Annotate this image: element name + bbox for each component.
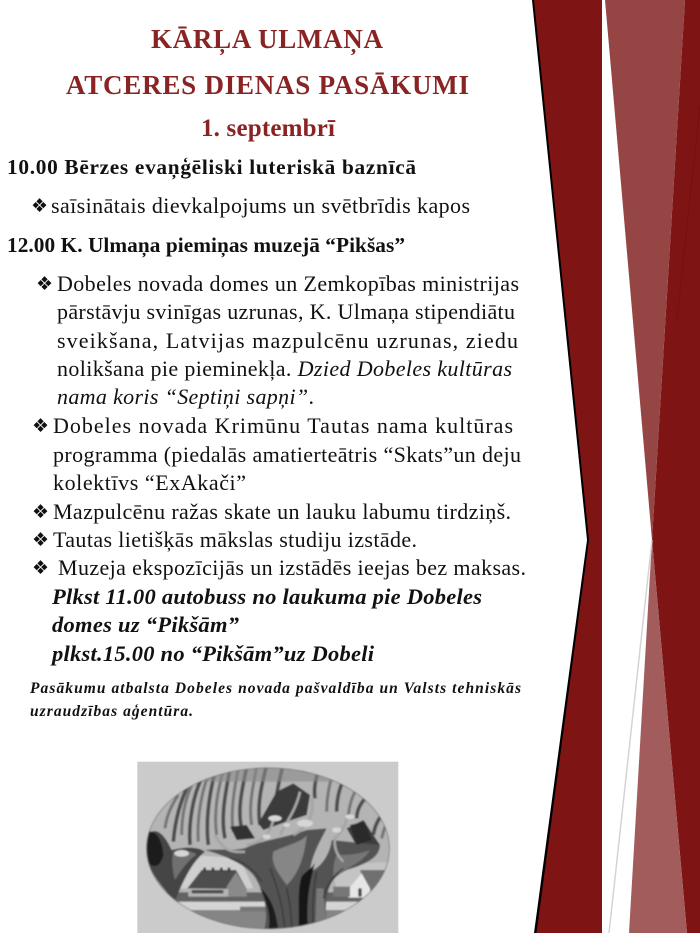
second event list (32, 271, 526, 580)
bus information: domes uz “Pikšām” (52, 612, 239, 637)
cut branch ends and shoots (215, 792, 347, 862)
item: speeches: nolikšana pie pieminekļa. Dzied Dobeles kultūras (57, 356, 512, 381)
bus information (50, 584, 482, 666)
item: speeches (36, 271, 519, 409)
item: free entry: ❖ (32, 557, 49, 579)
item: art exhibition: Tautas lietišķās mākslas studiju izstāde. (53, 527, 417, 552)
support note (30, 680, 521, 720)
support note: Pasākumu atbalsta Dobeles novada pašvaldība un Valsts tehniskās (30, 680, 521, 697)
item: free entry: Muzeja ekspozīcijās un izstādēs ieejas bez maksas. (58, 555, 526, 580)
farmhouse right (360, 869, 385, 892)
title (66, 24, 469, 100)
item: speeches: pārstāvju svinīgas uzrunas, K. Ulmaņa stipendiātu (57, 299, 515, 324)
item: Krimūnu programme: kolektīvs “ExAkači” (53, 470, 246, 495)
item: Krimūnu programme (32, 413, 521, 495)
first event heading: 10.00 Bērzes evaņģēliski luteriskā baznīcā (7, 155, 416, 180)
date heading: 1. septembrī (201, 115, 336, 142)
item: speeches: ❖ (36, 273, 53, 295)
item: Krimūnu programme: Dobeles novada Krimūnu Tautas nama kultūras (53, 413, 513, 438)
support note: uzraudzības aģentūra. (30, 703, 193, 720)
item: harvest show: Mazpulcēnu ražas skate un lauku labumu tirdziņš. (53, 499, 511, 524)
first event item: saīsinātais dievkalpojums un svētbrīdis kapos (51, 193, 470, 218)
item: harvest show: ❖ (32, 501, 49, 523)
item: speeches: Dobeles novada domes un Zemkopības ministrijas (57, 271, 519, 296)
item: speeches: nama koris “Septiņi sapņi”. (57, 384, 314, 409)
title: ATCERES DIENAS PASĀKUMI (66, 70, 469, 100)
ground (174, 892, 364, 902)
central willow (205, 828, 380, 932)
bus information: plkst.15.00 no “Pikšām”uz Dobeli (50, 641, 375, 666)
bus information: Plkst 11.00 autobuss no laukuma pie Dobeles (51, 584, 482, 609)
sky gap behind the farm (180, 855, 253, 888)
distant tree crown (258, 783, 310, 830)
left willow (147, 831, 205, 901)
first event item: ❖ (31, 195, 48, 217)
trunk hatching (230, 858, 343, 932)
second event heading: 12.00 K. Ulmaņa piemiņas muzejā “Pikšas” (7, 233, 405, 258)
item: art exhibition: ❖ (32, 529, 49, 551)
background tree strokes (173, 765, 385, 845)
title: KĀRĻA ULMAŅA (151, 24, 384, 56)
decorative right side ribbons (532, 0, 700, 933)
item: speeches: sveikšana, Latvijas mazpulcēnu uzrunas, ziedu (57, 328, 518, 353)
item: Krimūnu programme: ❖ (32, 415, 49, 437)
item: Krimūnu programme: programma (piedalās amatierteātris “Skats”un deju (53, 442, 521, 467)
photo: pencil drawing of willow trees and farmhouse (137, 762, 398, 933)
farmhouse left (187, 870, 247, 889)
